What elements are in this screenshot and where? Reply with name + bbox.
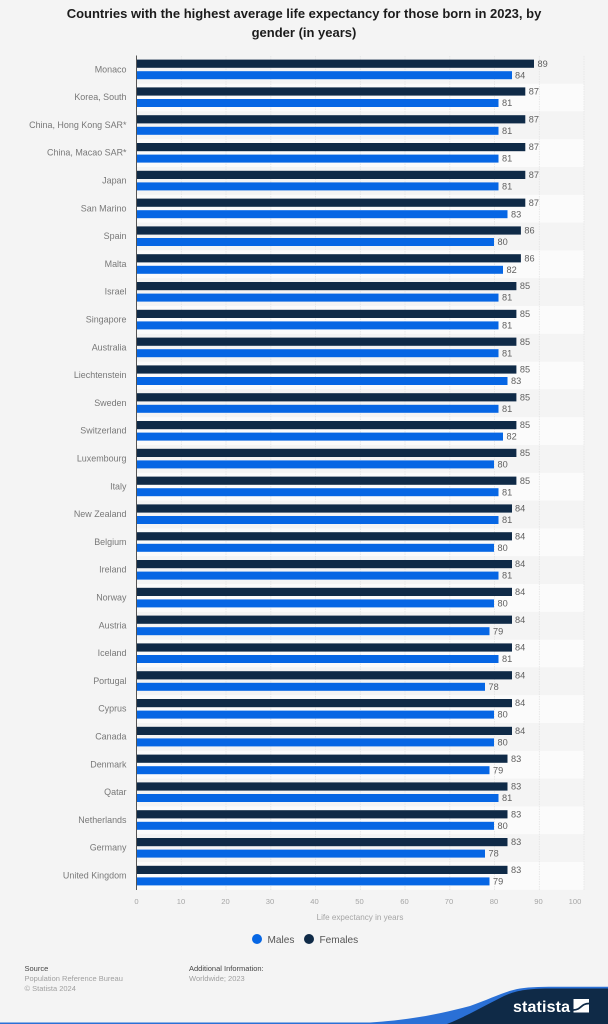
row: Denmark: Denmark	[90, 759, 127, 769]
row: United Kingdom: United Kingdom	[63, 870, 126, 880]
row: United Kingdom: 83	[511, 865, 521, 875]
row: Austria: 79	[493, 626, 503, 636]
row: Netherlands: 83	[511, 809, 521, 819]
row: Singapore	[86, 309, 530, 330]
icon: statista mark	[574, 999, 589, 1012]
row: Sweden: Sweden	[94, 398, 127, 408]
row: Portugal: 78	[488, 682, 499, 692]
row: China, Hong Kong SAR*	[29, 114, 539, 136]
row: Malta	[105, 253, 535, 275]
row: Cyprus: Cyprus	[98, 704, 127, 714]
row: Canada	[95, 726, 525, 748]
source: Population Reference Bureau	[24, 974, 123, 983]
row: Monaco: 89	[538, 59, 548, 69]
statista logo: statista	[513, 999, 570, 1016]
row: Sweden	[94, 392, 530, 414]
row: New Zealand: 84	[515, 504, 525, 514]
row: Portugal	[93, 670, 525, 692]
row: Netherlands	[78, 809, 521, 831]
row: Austria: 84	[515, 615, 525, 625]
row: Israel: 81	[502, 293, 512, 303]
row: China, Hong Kong SAR*: China, Hong Kong SAR*	[29, 120, 127, 130]
row: Spain: Spain	[104, 231, 127, 241]
row: New Zealand	[74, 504, 525, 525]
row: Denmark: 83	[511, 754, 521, 764]
x axis ticks: 50	[355, 897, 364, 906]
row: China, Macao SAR*: 81	[502, 154, 512, 164]
row: New Zealand: 81	[502, 515, 512, 525]
row: Netherlands: Netherlands	[78, 815, 127, 825]
row: Australia: Australia	[92, 342, 127, 352]
row: Italy: Italy	[110, 481, 127, 491]
row: Ireland	[99, 559, 525, 581]
row: Israel: Israel	[105, 287, 127, 297]
row: Sweden: 81	[502, 404, 512, 414]
row: Germany	[90, 837, 521, 859]
x axis ticks: 70	[445, 897, 453, 906]
row: Germany: 83	[511, 837, 521, 847]
row: Liechtenstein: 83	[511, 376, 521, 386]
row: China, Macao SAR*	[47, 142, 539, 164]
row: Norway	[96, 587, 525, 608]
row: Singapore: 81	[502, 320, 512, 330]
row: China, Macao SAR*: China, Macao SAR*	[47, 148, 127, 158]
row: Belgium: 80	[498, 543, 508, 553]
row: Singapore: Singapore	[86, 314, 127, 324]
source	[24, 964, 123, 993]
row: Germany: 78	[488, 849, 499, 859]
row: Korea, South: 81	[502, 98, 512, 108]
row: Cyprus: 84	[515, 698, 525, 708]
x axis ticks: 80	[490, 897, 498, 906]
row: Australia: 81	[502, 348, 512, 358]
row: Ireland: Ireland	[99, 565, 127, 575]
x axis ticks: 90	[534, 897, 543, 906]
row: Belgium: 84	[515, 531, 525, 541]
row: Austria	[99, 615, 525, 636]
additional information	[189, 964, 264, 983]
row: Norway: 80	[498, 598, 508, 608]
row: Japan	[102, 170, 539, 192]
footer wave	[0, 987, 608, 1024]
row: San Marino: San Marino	[81, 203, 127, 213]
row: Portugal: Portugal	[93, 676, 127, 686]
row: Canada: 84	[515, 726, 525, 736]
row: Australia: 85	[520, 337, 530, 347]
row: Japan: 81	[502, 182, 512, 192]
row: Korea, South: 87	[529, 87, 539, 97]
row: Germany: Germany	[90, 843, 127, 853]
row: Japan: Japan	[102, 176, 127, 186]
row: Canada: Canada	[95, 732, 127, 742]
row: Korea, South	[74, 87, 539, 108]
additional information: Worldwide; 2023	[189, 974, 245, 983]
row: Belgium	[94, 531, 525, 553]
row: China, Hong Kong SAR*: 81	[502, 126, 512, 136]
x axis ticks: 10	[177, 897, 185, 906]
source: © Statista 2024	[24, 984, 76, 993]
row: Ireland: 81	[502, 571, 512, 581]
row: Qatar: Qatar	[104, 787, 127, 797]
row: Iceland: 81	[502, 654, 512, 664]
row: Iceland: Iceland	[98, 648, 127, 658]
row: Denmark	[90, 754, 521, 775]
row: Switzerland: 82	[506, 432, 517, 442]
row: Luxembourg: Luxembourg	[77, 454, 127, 464]
row: Qatar: 83	[511, 782, 521, 792]
row: Korea, South: Korea, South	[74, 92, 127, 102]
legend	[252, 934, 358, 946]
row: Spain: 86	[524, 226, 535, 236]
source: Source	[24, 964, 48, 973]
row: Singapore: 85	[520, 309, 530, 319]
row: Norway: 84	[515, 587, 525, 597]
row: Luxembourg: 85	[520, 448, 530, 458]
bar chart	[29, 56, 584, 890]
row: China, Hong Kong SAR*: 87	[529, 114, 539, 124]
row: Portugal: 84	[515, 670, 525, 680]
row: San Marino: 83	[511, 209, 521, 219]
row: Monaco: Monaco	[95, 64, 127, 74]
row: Malta: 86	[524, 253, 535, 263]
row: Japan: 87	[529, 170, 539, 180]
row: Italy	[110, 476, 530, 497]
x axis ticks: 30	[266, 897, 274, 906]
row: Australia	[92, 337, 530, 358]
row: Sweden: 85	[520, 392, 530, 402]
x axis ticks: 60	[400, 897, 409, 906]
row: San Marino: 87	[529, 198, 539, 208]
row: Denmark: 79	[493, 765, 503, 775]
row: Austria: Austria	[99, 620, 127, 630]
row: United Kingdom: 79	[493, 876, 503, 886]
x axis ticks: 40	[310, 897, 319, 906]
row: Qatar	[104, 782, 521, 803]
x axis ticks: 100	[569, 897, 581, 906]
x axis title: Life expectancy in years	[317, 913, 403, 922]
row: Netherlands: 80	[498, 821, 508, 831]
row: Switzerland: 85	[520, 420, 530, 430]
row: United Kingdom	[63, 865, 521, 886]
x axis ticks: 20	[221, 897, 230, 906]
row: Iceland: 84	[515, 643, 525, 653]
row: Luxembourg: 80	[498, 460, 508, 470]
row: Belgium: Belgium	[94, 537, 126, 547]
row: Canada: 80	[498, 738, 508, 748]
x axis ticks	[134, 897, 581, 906]
title	[67, 6, 542, 40]
row: New Zealand: New Zealand	[74, 509, 127, 519]
row: Luxembourg	[77, 448, 530, 470]
row: Cyprus: 80	[498, 710, 508, 720]
row: Malta: 82	[506, 265, 517, 275]
row: Monaco: 84	[515, 70, 525, 80]
row: Ireland: 84	[515, 559, 525, 569]
legend: Females	[320, 935, 358, 946]
row: Liechtenstein	[74, 365, 530, 386]
row: Liechtenstein: Liechtenstein	[74, 370, 127, 380]
row: China, Macao SAR*: 87	[529, 142, 539, 152]
additional information: Additional Information:	[189, 964, 264, 973]
legend: Males	[268, 935, 294, 946]
row: Liechtenstein: 85	[520, 365, 530, 375]
title: Countries with the highest average life expectancy for those born in 2023, by	[67, 6, 542, 21]
row: Iceland	[98, 643, 525, 664]
row: Israel: 85	[520, 281, 530, 291]
row: Italy: 81	[502, 487, 512, 497]
row: Monaco	[95, 59, 548, 80]
row: Norway: Norway	[96, 592, 127, 602]
title: gender (in years)	[252, 25, 356, 40]
row: Malta: Malta	[105, 259, 127, 269]
row: Qatar: 81	[502, 793, 512, 803]
row: Switzerland: Switzerland	[80, 426, 127, 436]
row: Spain	[104, 226, 535, 247]
row: Spain: 80	[498, 237, 508, 247]
x axis ticks: 0	[134, 897, 139, 906]
row: Israel	[105, 281, 530, 303]
row: San Marino	[81, 198, 539, 219]
row: Switzerland	[80, 420, 530, 442]
row: Italy: 85	[520, 476, 530, 486]
row: Cyprus	[98, 698, 525, 720]
